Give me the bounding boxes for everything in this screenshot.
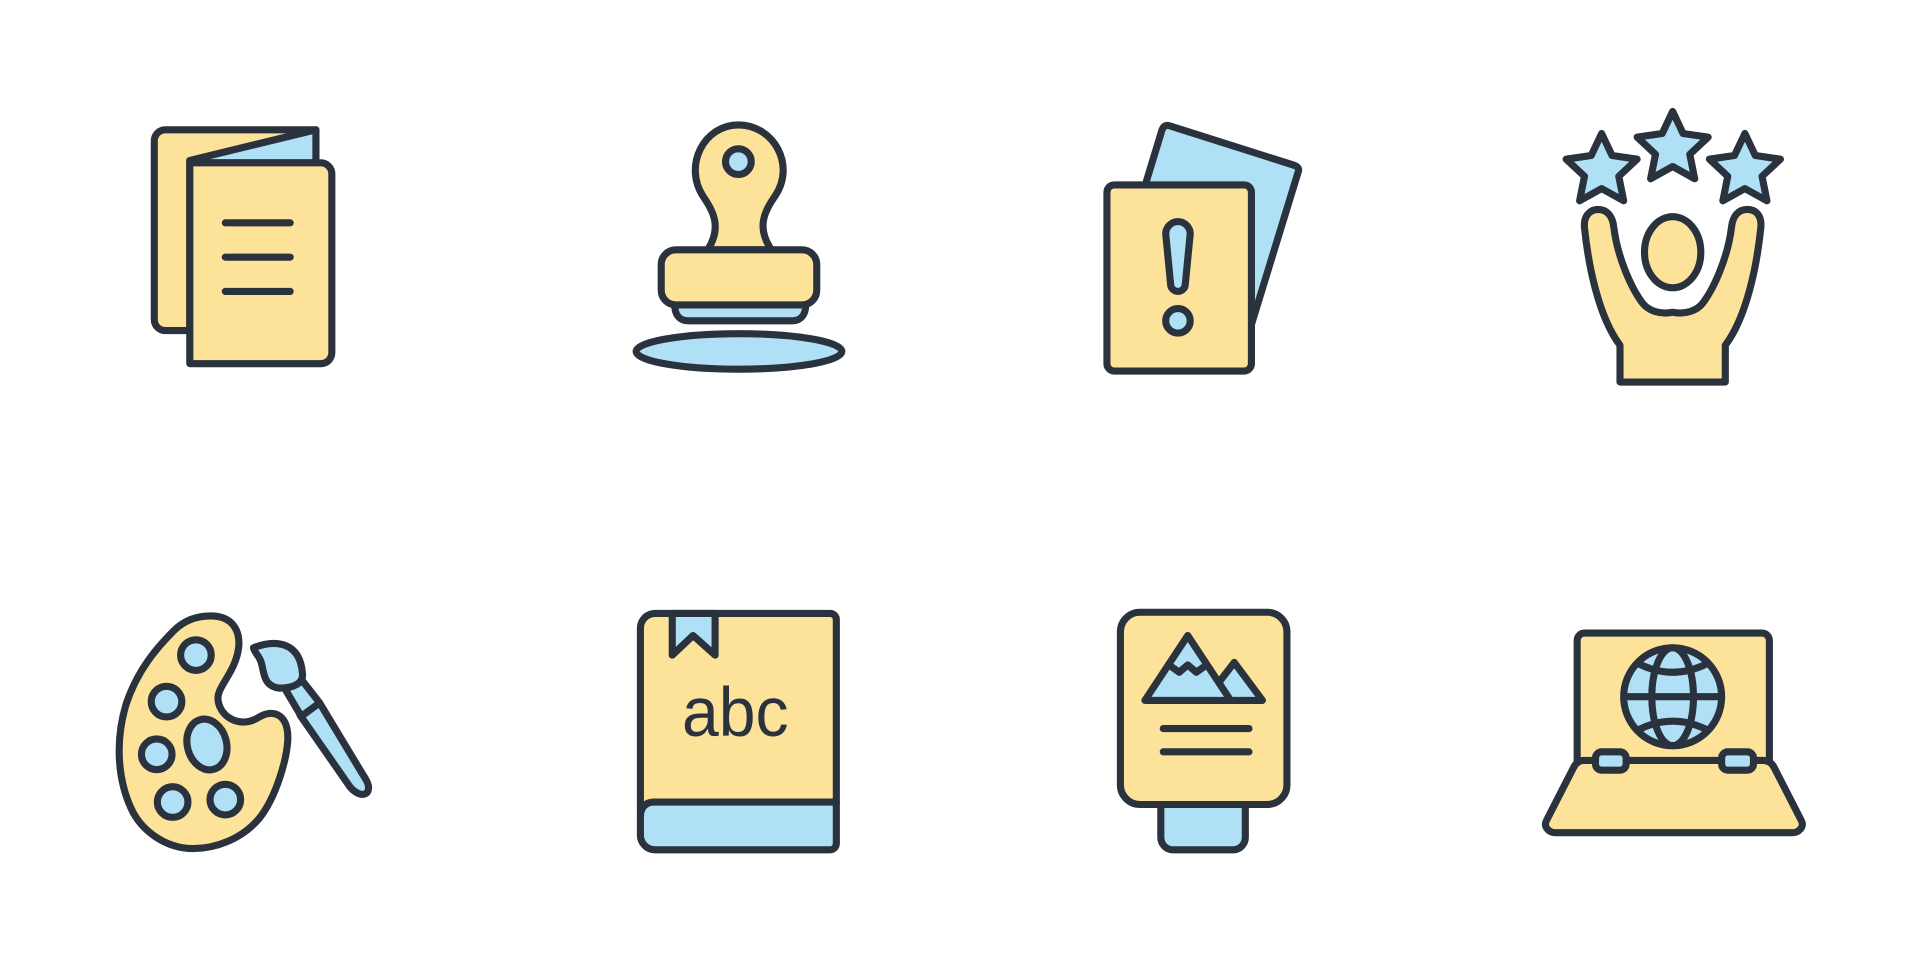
icon: three stars and raised arms	[1566, 111, 1780, 382]
person with arms raised	[1584, 209, 1761, 382]
icon: poster sign with mountains	[1120, 612, 1287, 850]
icon: abc book: abc	[682, 673, 789, 751]
icon: rubber stamp	[636, 125, 842, 369]
icon: laptop with globe	[1545, 633, 1802, 833]
icon: abc book	[640, 613, 836, 850]
star centre	[1637, 111, 1708, 179]
star right	[1709, 133, 1780, 201]
icon: warning sheets	[1107, 125, 1299, 371]
head	[1644, 217, 1701, 288]
icon: paint palette and brush	[119, 616, 369, 849]
globe	[1624, 648, 1722, 746]
icon: folded brochure	[154, 130, 332, 364]
star left	[1566, 133, 1637, 201]
